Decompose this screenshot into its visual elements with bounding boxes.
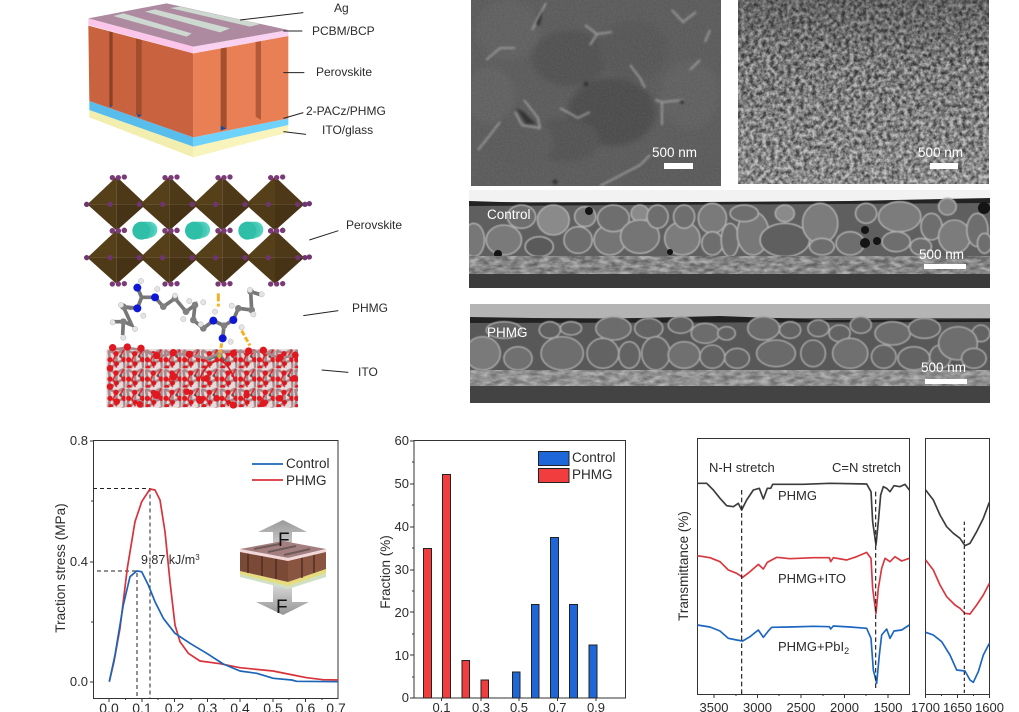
legend [538,450,616,482]
grain shading [534,32,656,158]
grain boundaries [478,3,710,186]
legend [252,456,330,488]
y axis values: 10 [395,648,409,663]
substrate band [470,386,990,403]
label: Perovskite: Perovskite [316,65,372,79]
y axis values: 0.8 [70,433,88,448]
top electrode band [470,304,990,318]
panel: SEM top view control [466,0,721,186]
label: PHMG: PHMG [487,325,528,340]
chart: traction stress curves [53,433,346,712]
perovskite grains [465,317,990,370]
y axis values: 20 [395,605,409,620]
voids [494,202,990,258]
axis frame and ticks [90,440,338,702]
legend: PHMG [286,473,326,488]
chart: FTIR spectra [676,438,910,712]
arrow down [256,584,309,615]
ITO band [470,370,990,387]
scale bar [925,379,967,384]
axis frame and ticks [410,440,626,701]
perovskite grains [463,198,992,257]
force labels: F [278,530,290,551]
label: PHMG: PHMG [352,301,388,315]
curve: PHMG [109,489,338,682]
x axis values [432,700,605,712]
y axis title: Transmittance (%) [676,511,691,621]
scale label: 500 nm [918,145,963,160]
bars: PHMG [424,474,488,698]
scale label: 500 nm [921,360,966,375]
leader lines [303,231,348,372]
noise texture [471,0,721,186]
y axis values [70,433,88,689]
y axis values: 0 [402,690,409,705]
label: PHMG: PHMG [778,488,817,503]
annotation: N-H stretch: N-H stretch [709,460,775,475]
annotation: toughness value: 9.87 kJ/m [141,553,195,567]
label: PHMG+PbI2: 2 [844,646,849,656]
ITO atomic slab [107,343,299,409]
rough texture [738,0,989,184]
label: PHMG+ITO: PHMG+ITO [778,571,846,586]
y axis values: 50 [395,476,409,491]
ITO band [469,256,990,274]
arrow up [258,520,307,550]
y axis values: 40 [395,519,409,534]
inset curves [926,490,989,694]
panel: SEM cross-section PHMG [465,304,990,403]
label: PHMG+PbI2: PHMG+PbI [778,639,844,654]
perovskite octahedra lattice [84,174,312,287]
label: Perovskite: Perovskite [346,218,402,232]
grain gaps [516,10,684,184]
label: Ag: Ag [334,1,349,15]
substrate band [469,274,990,288]
curve: Control [109,571,338,682]
PHMG molecule [110,278,264,344]
y axis title: Traction stress (MPa) [53,503,68,633]
scale bar [930,163,958,169]
x axis values [911,700,1004,712]
x axis values [700,700,902,712]
scale label: 500 nm [652,145,697,160]
y axis values [395,433,409,705]
y axis values: 0.0 [70,674,88,689]
inset: device under force: F [276,597,288,618]
legend: Control [572,450,616,465]
legend: PHMG [572,467,612,482]
label: ITO: ITO [358,365,378,379]
panel: SEM cross-section control [463,190,992,288]
panel: molecular interface model [84,174,402,409]
label: 2-PACz/PHMG: 2-PACz/PHMG [306,104,386,118]
chart: FTIR zoomed inset [911,438,1004,712]
panel: SEM top view PHMG [738,0,989,184]
inset: device under force [240,520,326,618]
axis frame and ticks [698,438,910,698]
chart: fraction histogram [378,433,626,712]
scale bar [664,163,693,169]
top electrode band [469,190,990,202]
depth shading [738,0,989,184]
x axis values [99,700,346,712]
spectra curves [697,483,909,694]
label: PCBM/BCP: PCBM/BCP [312,24,375,38]
y axis values: 60 [395,433,409,448]
annotation: toughness value: 3 [195,553,200,562]
hydrogen bond dashes [218,293,250,353]
legend: Control [286,456,330,471]
panel: device stack schematic [88,1,386,157]
bars: Control [512,538,597,698]
device layers illustration [88,3,306,157]
mini device [240,541,326,589]
y axis values: 30 [395,562,409,577]
scale bar [924,264,966,269]
scale label: 500 nm [919,247,964,262]
y axis title: Fraction (%) [378,535,393,609]
y axis values: 0.4 [70,554,88,569]
axis frame and ticks [926,438,990,698]
annotation: C=N stretch: C=N stretch [832,460,901,475]
dashed guide lines [93,488,150,698]
label: ITO/glass: ITO/glass [322,123,373,137]
label: Control: Control [487,207,531,222]
